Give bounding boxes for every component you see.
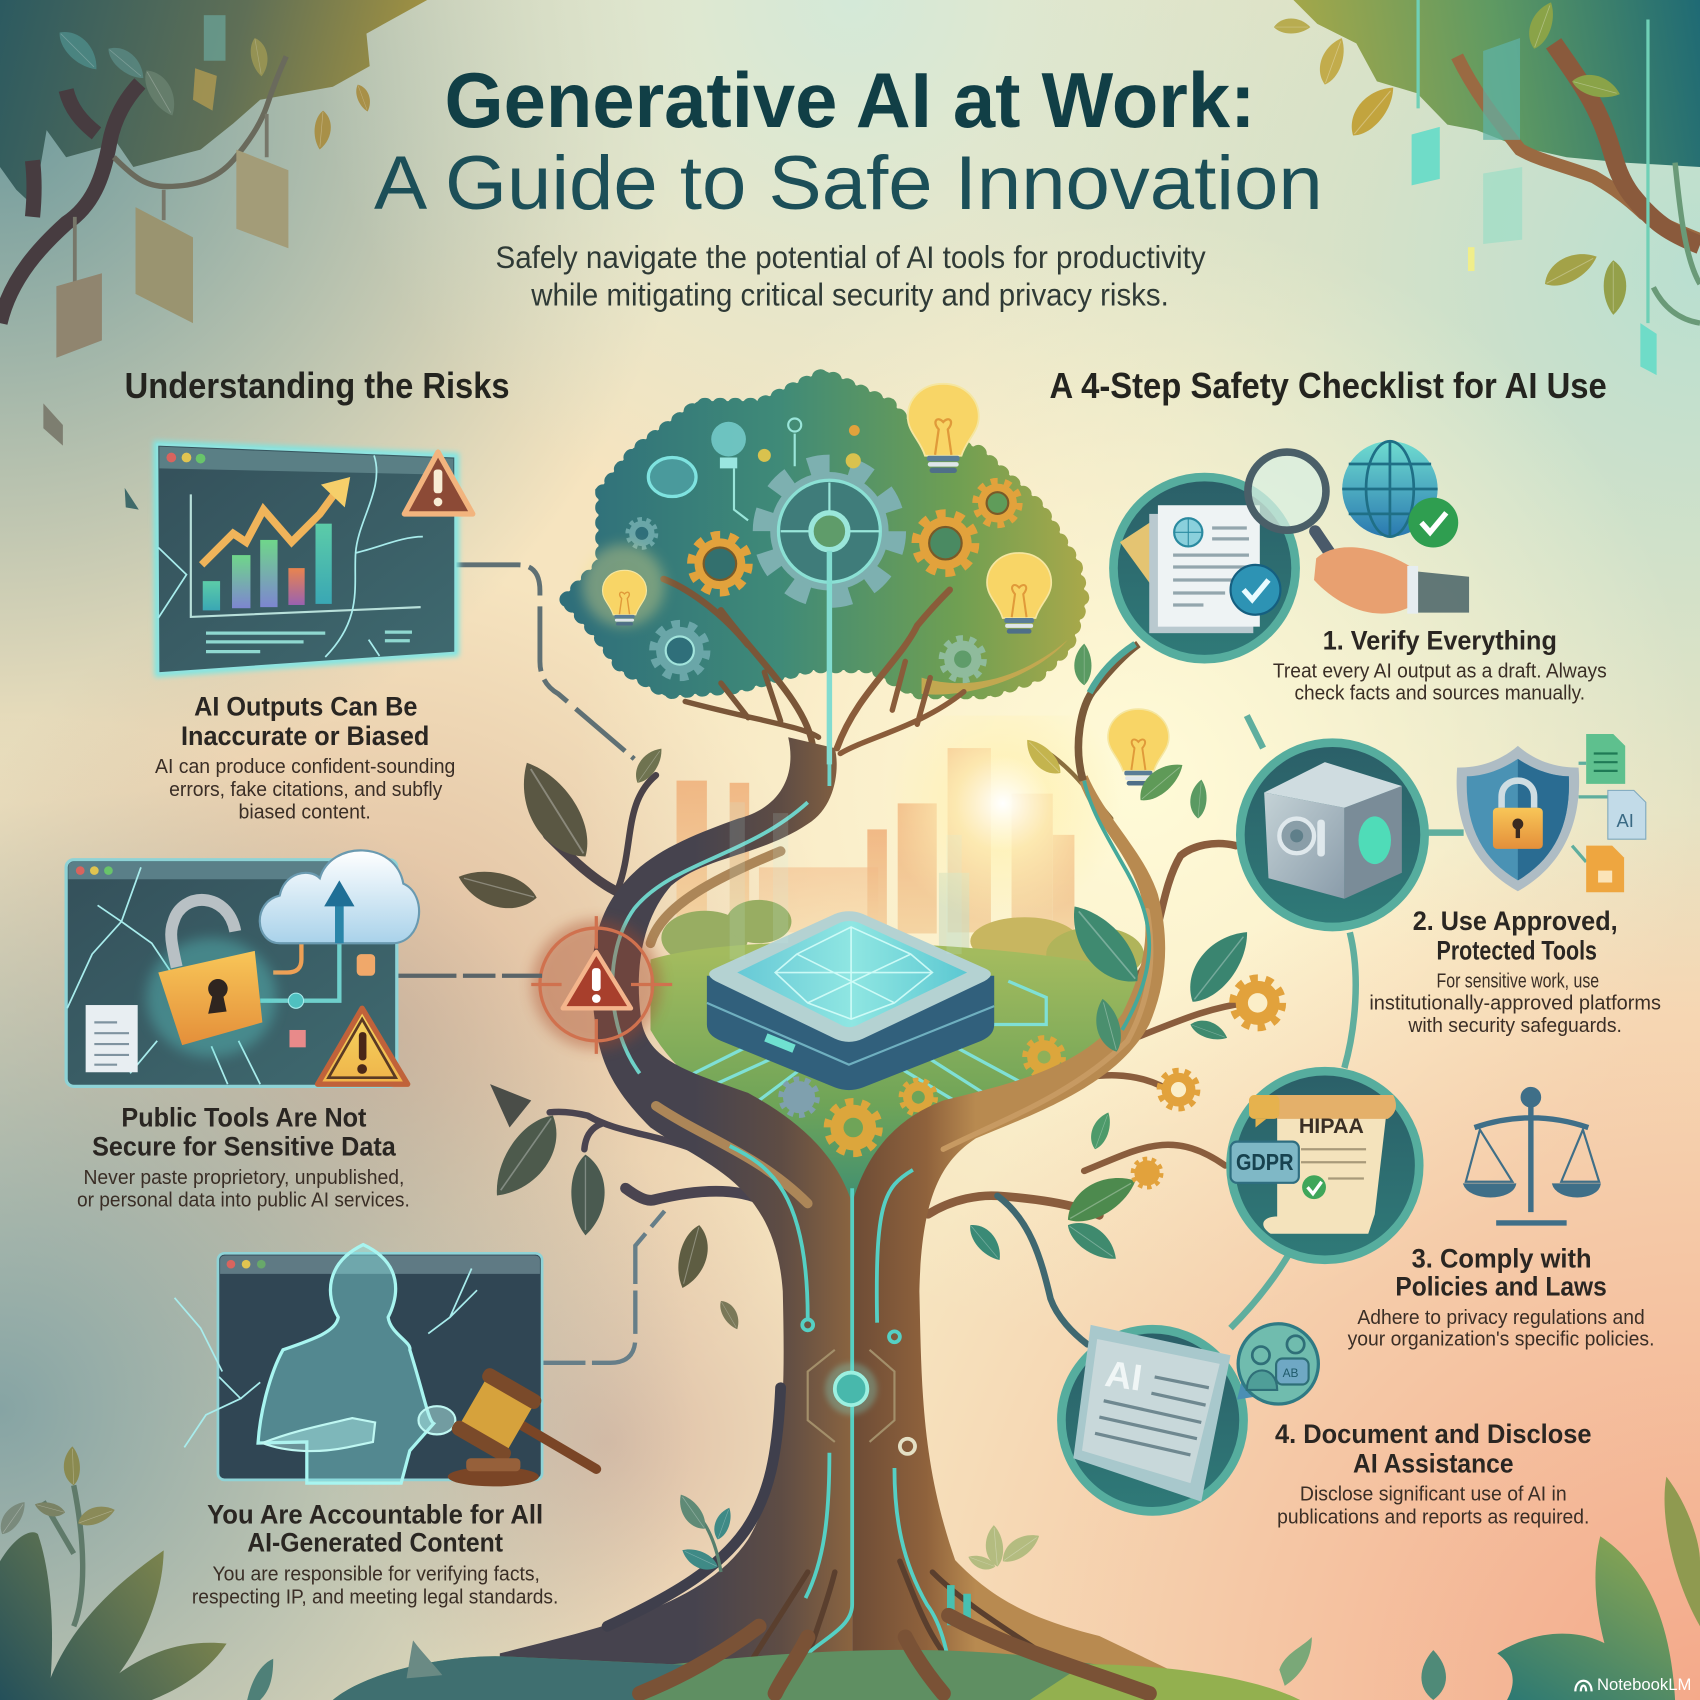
panel description: You are responsible for verifying facts, [212, 1563, 540, 1586]
teal gears and circuit icons [628, 418, 984, 680]
heading: risks: Understanding the Risks [125, 366, 510, 406]
panel: public tools [66, 850, 542, 1212]
subtitle [495, 240, 1206, 313]
step 3 [1231, 1071, 1654, 1350]
ground [333, 1650, 1300, 1700]
step 2 description: with security safeguards. [1407, 1014, 1622, 1037]
step 2 description: For sensitive work, use [1437, 970, 1599, 993]
gavel [448, 1366, 596, 1486]
NotebookLM mark: NotebookLM [1597, 1676, 1691, 1694]
panel heading: You Are Accountable for All [207, 1498, 543, 1529]
file icons: AI [1617, 810, 1634, 831]
data flow arrows [260, 905, 375, 1047]
corner foliage: top left tree [0, 0, 427, 446]
heading: checklist: A 4-Step Safety Checklist for AI Use [1049, 366, 1607, 406]
globe with check [1342, 441, 1458, 548]
step 3 circle with scroll: HIPAA [1299, 1113, 1364, 1138]
panel heading [92, 1101, 397, 1162]
ghost person [258, 1245, 455, 1483]
step 1 heading: 1. Verify Everything [1323, 624, 1557, 655]
panel description [155, 755, 455, 824]
orange gears [691, 481, 1019, 592]
step 3 description [1348, 1306, 1654, 1350]
subtitle: Safely navigate the potential of AI tools for productivity [495, 240, 1206, 275]
step 2 [1240, 716, 1661, 1068]
connector [542, 1211, 665, 1363]
step 2 heading: Protected Tools [1437, 935, 1597, 966]
leaves on healthy branch [964, 644, 1259, 1267]
left plants [43, 1485, 83, 1626]
right plants [1497, 1634, 1648, 1700]
open padlock [146, 900, 276, 1057]
broken window [66, 860, 397, 1086]
panel heading: Secure for Sensitive Data [92, 1131, 397, 1162]
step 4 heading: AI Assistance [1353, 1447, 1514, 1478]
step 1 [1090, 441, 1607, 704]
step 3 heading [1395, 1242, 1607, 1302]
orange gears on branches [1133, 978, 1282, 1187]
corner foliage: top right tree [1274, 0, 1700, 375]
trunk highlights and roots [607, 851, 1151, 1684]
step 4 circle with AI document [1061, 1325, 1244, 1511]
roots over ground [640, 1615, 1149, 1693]
circuit lines on tree [612, 542, 1149, 1684]
step 4 description: publications and reports as required. [1277, 1505, 1589, 1528]
title: Generative AI at Work: [445, 56, 1255, 144]
glass fragment [125, 488, 139, 510]
dead and living side branches [548, 748, 1247, 1344]
step 4 description [1277, 1483, 1589, 1528]
step 4 circle with AI document: AI [1103, 1353, 1145, 1399]
file icons [1572, 734, 1646, 892]
panel description: biased content. [239, 801, 371, 824]
title: A Guide to Safe Innovation [374, 141, 1323, 226]
light bulb on branch [1108, 709, 1169, 786]
panel description: respecting IP, and meeting legal standards. [192, 1586, 558, 1609]
right tree limb and trunk [852, 775, 1203, 1686]
chart window [157, 445, 455, 673]
panel heading: Public Tools Are Not [121, 1101, 366, 1132]
light bulbs in canopy [582, 384, 1051, 634]
step 2 circle with safe [1240, 743, 1425, 927]
magnifier in hand [1248, 452, 1469, 614]
panel: accountability [175, 1211, 665, 1609]
connector [1090, 644, 1135, 693]
panel description: errors, fake citations, and subfly [169, 778, 443, 801]
panel heading [207, 1498, 543, 1557]
disclosure badge: AB [1283, 1366, 1299, 1380]
tree canopy [567, 375, 1082, 695]
chat bubble [1249, 1095, 1279, 1128]
disclosure badge [1237, 1324, 1318, 1404]
panel description [192, 1563, 558, 1609]
step 3 description: your organization's specific policies. [1348, 1327, 1654, 1350]
panel description: AI can produce confident-sounding [155, 755, 455, 778]
warning triangle [404, 452, 473, 514]
scales of justice [1464, 1090, 1600, 1223]
GDPR badge [1231, 1142, 1299, 1183]
cloud [260, 850, 419, 943]
bottom foliage [0, 1446, 1700, 1700]
withered leaves [454, 743, 744, 1332]
central tree [454, 375, 1282, 1686]
connectors [1247, 716, 1464, 1068]
step 1 circle with document [1113, 477, 1296, 659]
big central gear [763, 464, 896, 764]
panel heading: Inaccurate or Biased [181, 720, 429, 751]
step 3 heading: Policies and Laws [1395, 1271, 1607, 1302]
central scene: skyline and park [651, 716, 1144, 1203]
ghost window [175, 1253, 542, 1480]
step 4 heading [1275, 1418, 1592, 1478]
subtitle: while mitigating critical security and privacy risks. [530, 278, 1169, 313]
connector [397, 974, 542, 978]
step 2 heading [1413, 905, 1618, 966]
panel heading: AI Outputs Can Be [194, 691, 417, 722]
connector [455, 565, 634, 759]
GDPR badge: GDPR [1236, 1149, 1293, 1175]
vine to step one [1078, 644, 1138, 781]
step 2 heading: 2. Use Approved, [1413, 905, 1618, 936]
step 3 circle with scroll [1231, 1071, 1419, 1260]
panel description: Never paste proprietory, unpublished, [83, 1166, 404, 1189]
step 2 description [1369, 970, 1661, 1037]
warning triangle [318, 1008, 408, 1084]
panel heading [181, 691, 429, 751]
shield with padlock [1457, 746, 1579, 891]
left tree limb and trunk [500, 737, 852, 1686]
tree branches in canopy [664, 579, 964, 754]
step 3 heading: 3. Comply with [1412, 1242, 1592, 1273]
small saplings by trunk [673, 1490, 1044, 1575]
chip [707, 802, 994, 1090]
panel heading: AI-Generated Content [247, 1526, 503, 1557]
step 1 description: check facts and sources manually. [1295, 681, 1585, 704]
step 1 description: Treat every AI output as a draft. Always [1273, 660, 1607, 683]
step 3 description: Adhere to privacy regulations and [1357, 1306, 1645, 1329]
title [374, 56, 1323, 226]
step 1 description [1273, 660, 1607, 704]
step 4 description: Disclose significant use of AI in [1300, 1483, 1567, 1506]
panel description [77, 1166, 410, 1212]
connector [1231, 1252, 1290, 1328]
panel description: or personal data into public AI services. [77, 1189, 410, 1212]
step 4 [1061, 1324, 1592, 1528]
step 2 description: institutionally-approved platforms [1369, 991, 1661, 1014]
central warning target [531, 916, 672, 1054]
step 4 heading: 4. Document and Disclose [1275, 1418, 1592, 1449]
panel: AI outputs [125, 445, 634, 824]
document [86, 1005, 138, 1072]
